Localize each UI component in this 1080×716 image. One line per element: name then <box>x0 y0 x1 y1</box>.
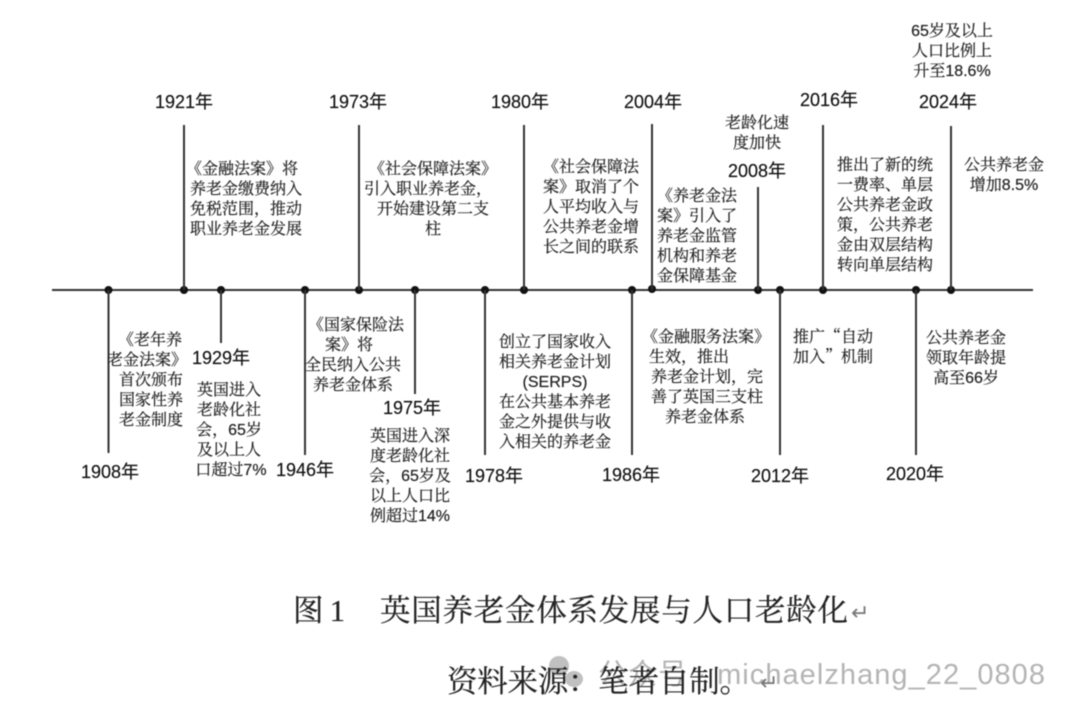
event 2008: 老龄化速 <box>725 114 789 132</box>
event 2024: 增加8.5% <box>970 176 1038 194</box>
event 1929: 会，65岁 <box>196 421 262 439</box>
event 2012 <box>751 290 873 486</box>
event 1921 <box>155 92 302 290</box>
event 1986: 1986年 <box>602 465 660 485</box>
event 2024: 65岁及以上 <box>911 22 993 40</box>
event 2020: 领取年龄提 <box>926 348 1006 367</box>
event 1978: (SERPS) <box>523 374 587 391</box>
event 2016: 转向单层结构 <box>837 256 933 274</box>
event 1908: 1908年 <box>81 462 139 482</box>
event 1921: 免税范围，推动 <box>190 200 302 218</box>
event 2024 <box>911 22 1044 290</box>
event 1986: 《金融服务法案》 <box>642 328 770 346</box>
event 1946: 养老金体系 <box>313 376 393 394</box>
event 1980: 长之间的联系 <box>543 238 639 256</box>
event 1973: 开始建设第二支 <box>377 200 489 218</box>
event 2012: 推广“自动 <box>793 324 873 347</box>
event 1946 <box>276 290 405 480</box>
event 2012: 加入”机制 <box>793 344 873 367</box>
event 1980: 1980年 <box>491 92 549 112</box>
event 2004: 养老金监管 <box>657 226 737 245</box>
event 2020: 2020年 <box>886 464 944 484</box>
event 2016: 2016年 <box>800 90 858 110</box>
event 1946: 1946年 <box>276 460 334 480</box>
event 2004: 2004年 <box>624 92 682 112</box>
event 2004: 《养老金法 <box>657 187 738 205</box>
event 2008: 度加快 <box>733 134 781 152</box>
event 1973: 《社会保障法案》 <box>369 160 497 178</box>
event 1980: 案》取消了个 <box>543 178 639 196</box>
event 1973: 1973年 <box>329 92 387 112</box>
event 1908: 《老年养 <box>118 330 182 349</box>
event 1975: 度老龄化社 <box>370 447 450 465</box>
event 2016: 公共养老金政 <box>837 196 933 214</box>
event 2016: 策，公共养老 <box>837 216 933 234</box>
event 2016: 一费率、单层 <box>837 176 933 194</box>
event 1975: 1975年 <box>383 398 441 418</box>
event 2012: 2012年 <box>751 466 809 486</box>
timeline axis <box>52 285 1033 294</box>
event 2004: 金保障基金 <box>657 267 737 285</box>
event 1978: 相关养老金计划 <box>499 353 611 371</box>
event 2020: 高至66岁 <box>933 368 999 387</box>
event 1978: 入相关的养老金 <box>499 433 611 451</box>
event 1986 <box>602 290 770 485</box>
event 1986: 生效，推出 <box>649 348 729 366</box>
event 1929: 老龄化社 <box>197 401 261 419</box>
event 1946: 全民纳入公共 <box>305 355 401 374</box>
figure caption: 英国养老金体系发展与人口老龄化 <box>380 594 848 628</box>
event 1908: 首次颁布 <box>119 371 183 389</box>
event 2020 <box>886 290 1006 484</box>
event 1973: 柱 <box>425 220 441 238</box>
event 1946: 《国家保险法 <box>308 316 405 334</box>
event 1978 <box>465 290 611 486</box>
event 1929: 1929年 <box>192 348 250 368</box>
event 1980: 《社会保障法 <box>543 158 640 176</box>
event 1921: 职业养老金发展 <box>190 220 302 238</box>
event 1929 <box>192 290 267 479</box>
event 2020: 公共养老金 <box>926 329 1006 347</box>
event 1986: 善了英国三支柱 <box>651 387 763 406</box>
icon: watermark logo <box>549 656 583 687</box>
event 1975: 例超过14% <box>370 506 450 525</box>
event 1908: 国家性养 <box>119 391 183 409</box>
event 1908 <box>81 290 187 482</box>
event 2024: 人口比例上 <box>912 42 992 60</box>
event 2016 <box>800 90 933 290</box>
event 1908: 老金制度 <box>119 411 183 429</box>
event 1921: 养老金缴费纳入 <box>190 179 302 198</box>
event 2016: 金由双层结构 <box>837 236 933 254</box>
event 1986: 养老金计划，完 <box>651 368 763 386</box>
figure caption: ↵ <box>851 601 869 626</box>
event 1921: 1921年 <box>155 92 213 112</box>
event 1986: 养老金体系 <box>665 408 745 426</box>
source note: ↵ <box>760 671 778 696</box>
event 1929: 口超过7% <box>195 460 267 479</box>
event 2004: 机构和养老 <box>657 247 737 265</box>
event 1978: 创立了国家收入 <box>499 333 611 351</box>
figure caption: 图 1 <box>293 594 345 628</box>
event 2004: 案》引入了 <box>657 207 737 225</box>
event 1980 <box>491 92 640 290</box>
event 1980: 公共养老金增 <box>543 218 639 236</box>
watermark text: 公众号 · michaelzhang_22_0808 <box>598 659 1045 691</box>
event 1975 <box>369 290 451 525</box>
event 1978: 金之外提供与收 <box>499 412 611 431</box>
event 1975: 英国进入深 <box>370 426 450 445</box>
event 1973: 引入职业养老金， <box>364 180 492 198</box>
event 1946: 案》将 <box>325 336 373 354</box>
event 1978: 1978年 <box>465 466 523 486</box>
event 2008 <box>725 114 789 290</box>
event 2004 <box>624 92 738 290</box>
event 1908: 老金法案》 <box>107 351 187 369</box>
event 1975: 会，65岁及 <box>369 467 451 485</box>
event 1978: 在公共基本养老 <box>499 393 611 411</box>
event 2024: 2024年 <box>919 92 977 112</box>
event 1975: 以上人口比 <box>370 487 450 505</box>
event 1980: 人平均收入与 <box>543 198 639 216</box>
event 1929: 及以上人 <box>197 441 261 459</box>
event 2016: 推出了新的统 <box>837 156 933 174</box>
event 1929: 英国进入 <box>197 380 261 399</box>
event 2024: 升至18.6% <box>913 62 991 80</box>
event 2008: 2008年 <box>728 161 786 181</box>
source note: 资料来源：笔者自制。 <box>447 665 750 699</box>
event 2024: 公共养老金 <box>964 156 1044 174</box>
event 1921: 《金融法案》将 <box>186 160 298 178</box>
event 1973 <box>329 92 497 290</box>
